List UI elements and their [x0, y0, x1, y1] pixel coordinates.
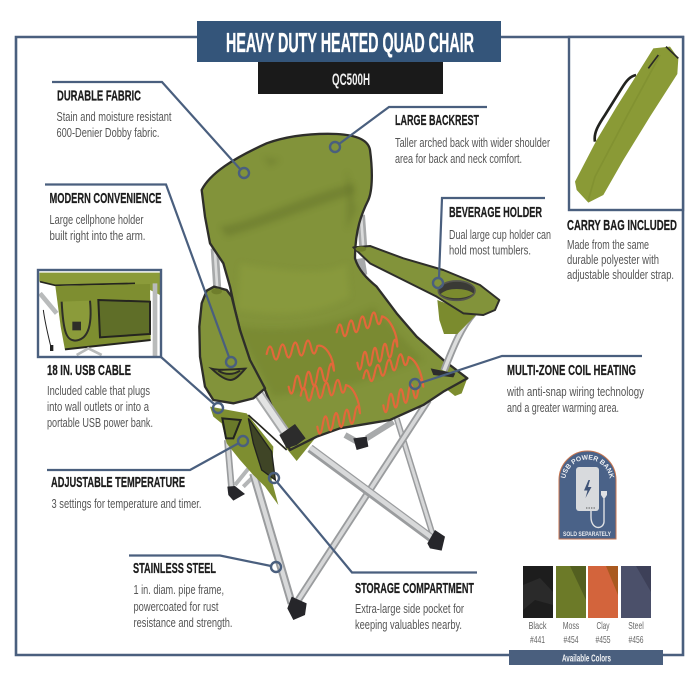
badge heading: USB POWER BANK	[560, 454, 614, 479]
chair back and seat fabric	[202, 134, 467, 450]
model number bar: QC500H	[332, 71, 370, 89]
icon: power bank	[576, 467, 607, 527]
heating coils	[267, 312, 423, 434]
heading: modern convenience: MODERN CONVENIENCE	[50, 190, 162, 207]
callout: large backrest	[330, 107, 550, 166]
callout: coil heating	[410, 356, 645, 415]
left arm pipe	[258, 393, 292, 442]
fabric shading	[220, 157, 423, 397]
swatch: black: #441	[530, 634, 545, 646]
leader line: durable fabric	[52, 82, 249, 178]
heading: stainless steel: STAINLESS STEEL	[133, 560, 216, 577]
photo: side pocket close-up	[39, 273, 160, 356]
side pocket	[210, 407, 287, 505]
badge: usb power bank	[558, 450, 616, 540]
swatch: steel: #456	[628, 634, 644, 646]
leader line: stainless steel	[129, 556, 281, 572]
text: carry bag: Made from the same	[567, 238, 649, 252]
heading: storage compartment: STORAGE COMPARTMENT	[355, 580, 474, 597]
icon: cup holder	[438, 281, 475, 300]
panel: carry bag photo	[569, 37, 683, 210]
callout: storage compartment	[269, 473, 477, 632]
seat flap left	[285, 438, 315, 461]
swatch: moss: Moss	[563, 620, 579, 632]
text: storage compartment: Extra-large side pocket for	[355, 602, 464, 616]
text: modern convenience: Large cellphone holder	[50, 213, 144, 227]
leader line: adjustable temperature	[47, 436, 248, 470]
chair illustration	[199, 134, 499, 620]
text: modern convenience	[50, 213, 146, 243]
heading: large backrest: LARGE BACKREST	[395, 112, 479, 129]
text: usb cable: Included cable that plugs	[47, 384, 150, 398]
heading: usb cable: 18 IN. USB CABLE	[47, 362, 131, 379]
model number bar	[258, 62, 443, 94]
panel: USB cable inset photo	[38, 270, 161, 357]
badge footer: SOLD SEPARATELY	[563, 531, 612, 538]
seat bracket left	[279, 424, 306, 448]
text: stainless steel: 1 in. diam. pipe frame,	[134, 583, 224, 597]
swatch: steel	[621, 566, 651, 646]
callout: modern convenience	[45, 184, 236, 367]
text: large backrest: Taller arched back with wider shoulder	[395, 136, 550, 150]
icon: phone pocket	[212, 369, 245, 380]
swatch: clay: Clay	[596, 620, 610, 632]
chair legs	[227, 400, 438, 603]
text: durable fabric: Stain and moisture resistant	[56, 110, 172, 124]
text: beverage holder: hold most tumblers.	[449, 244, 531, 258]
text: durable fabric	[56, 110, 172, 140]
text: durable fabric: 600-Denier Dobby fabric.	[56, 126, 160, 140]
text: large backrest	[395, 136, 550, 166]
leader line: storage compartment	[269, 473, 477, 572]
callout: adjustable temperature	[47, 436, 248, 511]
text: usb cable: portable USB power bank.	[47, 416, 153, 430]
text: carry bag: durable polyester with	[567, 253, 659, 267]
text: modern convenience: built right into the arm.	[50, 229, 146, 243]
icon: carry bag	[575, 47, 678, 203]
cup pocket	[437, 300, 476, 334]
leader line: beverage holder	[433, 198, 545, 288]
text: stainless steel	[134, 583, 232, 630]
swatch: black: Black	[528, 620, 547, 632]
text: carry bag	[567, 238, 674, 282]
callout: beverage holder	[433, 198, 551, 288]
text: usb cable: into wall outlets or into a	[47, 400, 149, 414]
swatch: clay: #455	[596, 634, 611, 646]
swatch: black	[523, 566, 553, 646]
title: HEAVY DUTY HEATED QUAD CHAIR	[226, 27, 474, 58]
leader line: usb cable	[161, 357, 223, 413]
callout: stainless steel	[129, 556, 281, 630]
text: coil heating: with anti-snap wiring technology	[506, 385, 645, 399]
text: coil heating	[506, 385, 645, 415]
swatch: steel: Steel	[628, 620, 644, 632]
available colors bar: Available Colors	[562, 652, 611, 664]
chair feet	[227, 437, 445, 620]
seat bracket right	[431, 368, 455, 377]
swatch: moss	[556, 566, 586, 646]
callout: durable fabric	[52, 82, 249, 178]
text: storage compartment: keeping valuables nearby.	[355, 618, 462, 632]
swatch: moss: #454	[564, 634, 579, 646]
colour swatches	[523, 566, 651, 646]
leader line: large backrest	[330, 107, 487, 152]
heading: beverage holder: BEVERAGE HOLDER	[449, 204, 542, 221]
swatch: clay	[588, 566, 618, 646]
text: beverage holder: Dual large cup holder can	[449, 228, 551, 242]
callout: usb cable	[47, 357, 223, 430]
text: beverage holder	[449, 228, 551, 258]
back pipes	[215, 215, 363, 290]
seat flap right	[443, 378, 467, 396]
title banner	[197, 21, 501, 62]
heading: durable fabric: DURABLE FABRIC	[57, 88, 141, 104]
text: adjustable temperature: 3 settings for temperature and timer.	[52, 497, 202, 511]
text: storage compartment	[355, 602, 464, 632]
right arm pipe	[444, 313, 473, 371]
callout: carry bag	[567, 217, 677, 282]
heading: adjustable temperature: ADJUSTABLE TEMPERATURE	[51, 474, 185, 491]
leader line: modern convenience	[45, 184, 236, 367]
text: stainless steel: powercoated for rust	[134, 600, 219, 614]
text: usb cable	[47, 384, 153, 430]
text: large backrest: area for back and neck comfort.	[395, 152, 522, 166]
left arm rest with phone holder	[199, 287, 265, 403]
available colors bar	[509, 650, 663, 665]
right arm rest	[353, 246, 499, 315]
text: coil heating: and a greater warming area.	[507, 401, 619, 415]
text: stainless steel: resistance and strength.	[134, 616, 232, 630]
leader line: coil heating	[410, 356, 642, 389]
